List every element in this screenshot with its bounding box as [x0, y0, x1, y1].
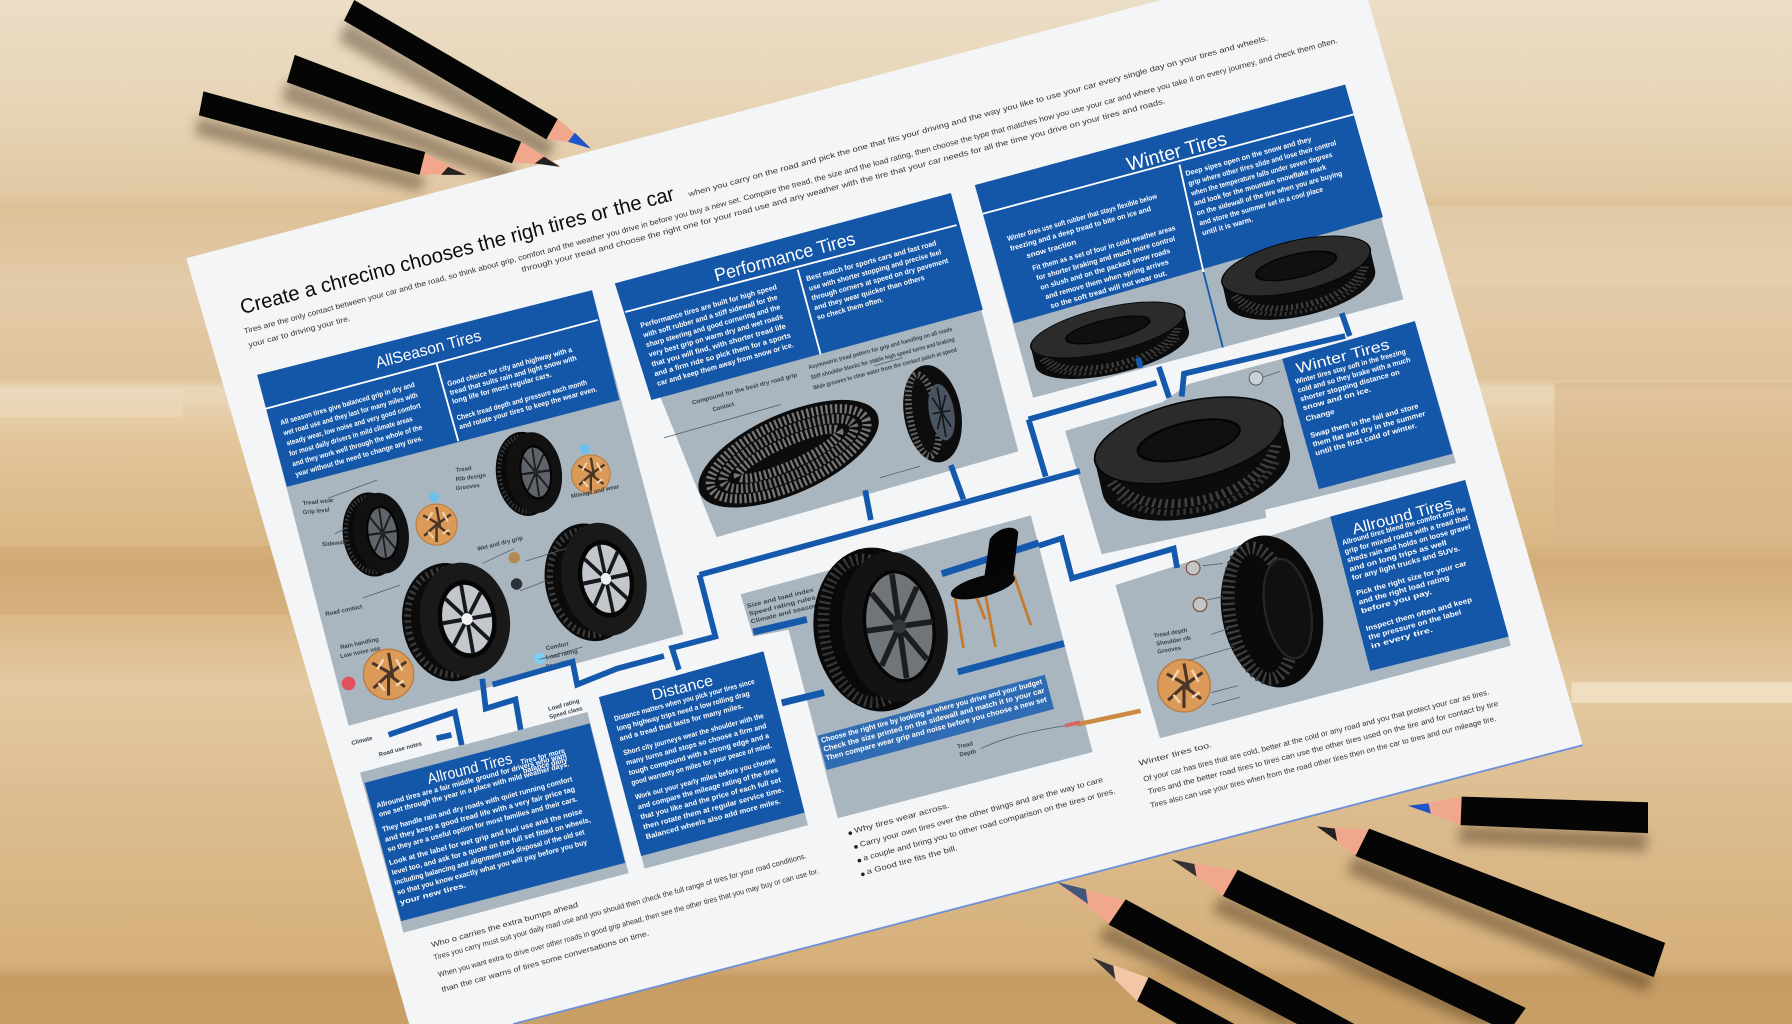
- callout labels: Road contact: [325, 604, 363, 618]
- intro text: Tires are the only contact between your car and the road, so think about grip, comfort and the weather you drive in before you buy a new set. Compare the tread, the size and the load rating, then choose the type that matches how you use your car and where you take it on every journey, and check them often.: [243, 36, 1338, 336]
- label: [957, 726, 1065, 759]
- bottom note left: than the car warns of tires some conversations on time.: [440, 929, 650, 994]
- intro text: through your tread and choose the right one for your road use and any weather with the tire that your car needs for all the time you drive on your tires and roads.: [521, 96, 1166, 274]
- right column text: and look for the mountain snowflake mark: [1193, 162, 1328, 208]
- panel text: level too, and ask for a quote on the full set fitted on wheels,: [391, 815, 592, 877]
- right column text: through corners at speed on dry pavement: [810, 256, 950, 302]
- bottom note left: Who o carries the extra bumps ahead: [430, 900, 579, 949]
- panel text: Short city journeys wear the shoulder with the: [622, 711, 765, 757]
- orange disc: [1158, 659, 1210, 712]
- callout labels: Grooves: [455, 483, 481, 492]
- callout text: Contact: [712, 402, 735, 413]
- right column text: on the sidewall of the tire when you are buying: [1195, 169, 1343, 218]
- pencil 7: [1057, 882, 1354, 1024]
- narrow tire: [896, 360, 969, 467]
- panel text: Work out your yearly miles before you choose: [634, 755, 777, 801]
- intro text: when you carry on the road and pick the one that fits your driving and the way you like to use your car every single day on your tires and wheels.: [686, 34, 1269, 199]
- large winter tire: [1086, 381, 1300, 537]
- orange disc icons: [363, 455, 610, 699]
- right column text: grip where other tires slide and lose their control: [1187, 138, 1337, 188]
- left column text: snow traction: [1025, 237, 1077, 260]
- left column text: [278, 380, 431, 479]
- panel text: and on long trips as well: [1348, 538, 1448, 574]
- left column text: very best grip on warm dry and wet roads: [648, 312, 784, 359]
- right column text: Good choice for city and highway with a: [446, 345, 574, 388]
- callout labels: Grip level: [302, 507, 330, 516]
- callout labels: Load rating: [545, 649, 579, 661]
- right column text: tread that suits rain and light snow with: [449, 353, 578, 397]
- right column text: and they wear quicker than others: [813, 273, 926, 312]
- panel text: Inspect them often and keep: [1365, 595, 1474, 633]
- heading: winter tires: Winter Tires: [1124, 128, 1229, 176]
- panel text: for any light trucks and SUVs.: [1351, 544, 1461, 582]
- bottom note right: Of your car has tires that are cold, better at the cold or any road and you that protect your car as tires.: [1142, 687, 1490, 784]
- left column text: wet road use and they last for many miles with: [281, 390, 419, 438]
- streak text block: Then compare wear grip and noise before you choose a new set: [825, 694, 1048, 762]
- bottom note left: Tires you carry must suit your daily road use and you should then check the full range of tires for your road conditions.: [432, 851, 807, 962]
- left column text: Winter tires use soft rubber that stays flexible below: [1006, 191, 1158, 243]
- paper sheet: [186, 0, 1583, 1024]
- panel text: Tires for more: [519, 746, 566, 767]
- panel: all season tires: [257, 290, 683, 726]
- panel text: and compare the mileage rating of the tires: [637, 765, 779, 811]
- left column text: and they work well through the whole of the: [291, 423, 423, 468]
- bullet list: a Good tire fits the bill.: [866, 843, 958, 876]
- panel text: Allround tires blend the comfort and the: [1341, 504, 1467, 547]
- panel text: cold and so they brake with a much: [1297, 355, 1411, 395]
- left column text: for most daily drivers in mild climate areas: [288, 414, 414, 458]
- marker icon: [1249, 371, 1280, 385]
- left column text: for shorter braking and much more control: [1035, 234, 1176, 282]
- callout labels: Tread wear: [302, 498, 335, 507]
- callout text: [664, 327, 958, 438]
- left column text: [638, 282, 795, 388]
- pencil 1: [344, 0, 591, 149]
- panel: distance: [599, 651, 808, 869]
- left column text: that you will find, with shorter tread life: [650, 322, 787, 369]
- panel text: one set through the year in a place with mild weather days.: [378, 759, 570, 819]
- panel text: then rotate them at regular service time.: [642, 785, 785, 831]
- panel text: Distance matters when you pick your tires since: [613, 677, 756, 723]
- bottom note left: When you want extra to drive over other roads in good grip ahead, then see the other tires that you may buy or can use for.: [437, 866, 820, 979]
- callout labels: Rib design: [455, 473, 487, 483]
- label: Tread: [957, 741, 974, 751]
- panel text: Allround tires are a fair middle ground for drivers who want: [375, 750, 568, 810]
- heading: all season tires: AllSeason Tires: [374, 328, 483, 372]
- left column text: steady wear, low noise and very good comfort: [285, 400, 422, 448]
- callout text: Size and load index: [746, 587, 815, 610]
- left column text: on slush and on the packed snow roads: [1039, 246, 1171, 292]
- pencil shadows: [194, 21, 1654, 1024]
- divider lines: [983, 114, 1354, 214]
- callout text: Stiff shoulder blocks for stable high speed turns and braking: [810, 337, 956, 381]
- chair: [948, 528, 1031, 648]
- right column text: long life for most regular cars.: [451, 370, 553, 406]
- streak text block: Check the size printed on the sidewall and match it to your car: [822, 686, 1046, 754]
- callout labels: Speed: [545, 661, 564, 671]
- pencil tool: [1065, 711, 1141, 726]
- left column text: and a firm ride so pick them for a sports: [653, 331, 792, 378]
- flat tire left: [1026, 290, 1195, 391]
- label: Depth: [959, 749, 977, 759]
- panel text: your new tires.: [399, 880, 467, 907]
- left column text: and remove them when spring arrives: [1044, 257, 1170, 301]
- divider lines: [264, 320, 598, 441]
- flat tire right: [1216, 224, 1382, 332]
- panel text: [375, 746, 600, 907]
- panel text: Winter tires stay soft in the freezing: [1294, 347, 1407, 386]
- left column text: year without the need to change any tires.: [294, 434, 424, 479]
- right column text: until it is warm.: [1201, 215, 1254, 237]
- panel text: [1294, 346, 1429, 458]
- bottom note right: Winter tires too.: [1138, 740, 1213, 768]
- left column text: car and keep them away from snow or ice.: [656, 340, 795, 388]
- panel text: them flat and dry in the summer: [1312, 409, 1426, 449]
- small connector labels: Load rating: [548, 699, 581, 713]
- bullet list: [848, 775, 1116, 876]
- callout labels: Wet and dry grip: [477, 536, 524, 553]
- intro text: your car to driving your tire.: [247, 314, 351, 349]
- heading: winter tires: Winter Tires: [1295, 337, 1391, 377]
- panel text: including balancing and alignment and disposal of the old set: [393, 827, 586, 887]
- bottom note right: Tires and the better road tires to tires can use the other tires used on the tire and for contact by tire: [1147, 699, 1499, 796]
- right column text: [446, 341, 598, 431]
- right column text: and store the summer set in a cool place: [1198, 185, 1324, 227]
- panel text: and the right load rating: [1357, 573, 1450, 607]
- divider lines: [625, 225, 957, 354]
- right column text: and rotate your tires to keep the wear even.: [458, 384, 598, 431]
- pencils top: [199, 0, 591, 175]
- panel text: sheds rain and holds on loose gravel: [1346, 522, 1472, 565]
- panel: central tire chooser: [741, 515, 1141, 818]
- heading: performance tires: Performance Tires: [712, 228, 857, 286]
- markers and labels: Tread depth: [1154, 628, 1188, 640]
- panel: winter tires: [975, 85, 1403, 398]
- panel: performance tires: [615, 193, 1018, 537]
- tire illustrations: [337, 427, 657, 689]
- allround tire: [1209, 527, 1335, 696]
- small connector labels: Speed class: [549, 706, 584, 721]
- callout labels: Sidewall: [322, 540, 346, 548]
- bottom note right: Tires also can use your tires when from the road other tires then on the car to tires and our mileage tire.: [1149, 714, 1497, 810]
- panel text: good warranty on miles for your peace of mind.: [630, 741, 773, 787]
- pencil 5: [1317, 826, 1665, 977]
- callout text: Asymmetric tread pattern for grip and handling on all roads: [808, 327, 954, 371]
- bullet list: a couple and bring you to other road comparison on the tires or tires.: [862, 786, 1116, 863]
- blue accent bars: [753, 543, 1064, 703]
- left column text: with soft rubber and a stiff sidewall for the: [641, 293, 778, 340]
- pencil 8: [1093, 958, 1234, 1024]
- panel text: so that you know exactly what you will pay before you buy: [396, 837, 589, 897]
- callout labels: Mileage and wear: [571, 484, 621, 500]
- pencils bottom: [1057, 797, 1665, 1024]
- panel text: and a tread that lasts for many miles.: [618, 701, 744, 743]
- callout labels: [302, 466, 621, 671]
- callout labels: Rain handling: [340, 637, 380, 651]
- left column text: Performance tires are built for high speed: [639, 282, 778, 330]
- streak text block: Choose the right tire by looking at where you drive and your budget: [820, 677, 1044, 745]
- left column text: sharp steering and good cornering and the: [645, 302, 781, 349]
- panel: winter tires detail: [1065, 321, 1456, 554]
- callout labels: Comfort: [545, 642, 569, 652]
- left column text: so the soft tread will not wear out.: [1049, 268, 1168, 310]
- callout text: Compound for the best dry road grip: [692, 373, 798, 407]
- main tire: [803, 538, 958, 720]
- panel text: long highway trips need a low rolling drag: [616, 689, 751, 733]
- panel text: tough compound with a strong edge and a: [628, 731, 771, 777]
- tread close-up: [684, 378, 894, 530]
- panel text: many turns and stops so choose a firm and: [625, 721, 767, 767]
- bottom note middle: [848, 775, 1116, 876]
- pencil 6: [1171, 859, 1526, 1024]
- right column text: [805, 236, 955, 322]
- right column text: Check tread depth and pressure each month: [456, 378, 588, 422]
- pencil 2: [287, 55, 560, 167]
- small connector labels: [351, 699, 584, 759]
- heading: distance: Distance: [650, 672, 715, 704]
- callout text: [746, 587, 819, 625]
- title: Create a chrecino chooses the righ tires or the car: [238, 182, 677, 319]
- panel text: grip for mixed roads with a tread that: [1343, 513, 1470, 556]
- panel text: in every tire.: [1370, 625, 1434, 651]
- markers and labels: [1154, 561, 1240, 705]
- panel text: Swap them in the fall and store: [1309, 401, 1419, 440]
- callout text: Wide grooves to clear water from the contact patch at speed: [813, 347, 958, 392]
- panel text: that you like and the price of each full set: [639, 775, 782, 821]
- callout text: Speed rating rules: [748, 595, 817, 618]
- panel text: before you pay.: [1360, 587, 1433, 615]
- right column text: Best match for sports cars and fast road: [805, 238, 937, 283]
- markers and labels: Grooves: [1157, 645, 1182, 656]
- left column text: freezing and a deep tread to bite on ice and: [1009, 204, 1152, 253]
- panel text: Pick the right size for your car: [1355, 558, 1468, 598]
- panel: allround tires left: [360, 712, 629, 933]
- callout labels: Low noise use: [340, 646, 382, 660]
- panel text: [1341, 504, 1496, 651]
- panel text: Change: [1305, 407, 1336, 423]
- small connector labels: Climate: [351, 736, 374, 747]
- panel text: Look at the label for wet grip and fuel use and the noise: [388, 807, 583, 867]
- heading: allround tires: Allround Tires: [426, 751, 514, 788]
- right column text: so check them often.: [816, 295, 884, 322]
- panel text: shorter stopping distance on: [1299, 367, 1401, 404]
- panel text: They handle rain and dry roads with quiet running comfort: [381, 774, 574, 834]
- small connector labels: Road use notes: [378, 741, 423, 759]
- right column text: when the temperature falls under seven degrees: [1189, 150, 1333, 198]
- panel: allround tires right: [1115, 480, 1511, 738]
- bullet list: Why tires wear across.: [853, 801, 950, 835]
- callout markers: [342, 444, 590, 690]
- left column text: All season tires give balanced grip in dry and: [279, 380, 416, 427]
- panel text: [613, 677, 788, 841]
- panel text: snow and on ice.: [1301, 385, 1372, 412]
- right column text: [1184, 128, 1351, 238]
- pencil 3: [199, 91, 466, 175]
- left column text: [1006, 189, 1188, 317]
- panel text: and they keep a good tread life with a very fair price tag: [384, 784, 576, 844]
- panel text: Balanced wheels also add more miles.: [645, 796, 782, 841]
- panel text: the pressure on the label: [1367, 607, 1462, 642]
- panel text: balance daily: [522, 755, 569, 775]
- callout labels: Tread: [455, 466, 472, 474]
- panel text: so they are a useful option for most families and their cars.: [386, 794, 579, 854]
- bullet list: Carry your own tires over the other things and are the way to care: [859, 775, 1104, 849]
- right column text: Deep sipes open on the snow and they: [1184, 134, 1313, 178]
- connector lines: [389, 313, 1350, 745]
- right column text: use with shorter stopping and precise feel: [808, 247, 942, 293]
- callout text: Climate and season: [750, 603, 819, 625]
- pencil 4: [1408, 797, 1648, 833]
- panel text: until the first cold of winter.: [1314, 421, 1418, 458]
- markers and labels: Shoulder rib: [1156, 636, 1192, 648]
- heading: allround tires: Allround Tires: [1350, 495, 1454, 538]
- left column text: Fit them as a set of four in cold weather areas: [1031, 223, 1177, 273]
